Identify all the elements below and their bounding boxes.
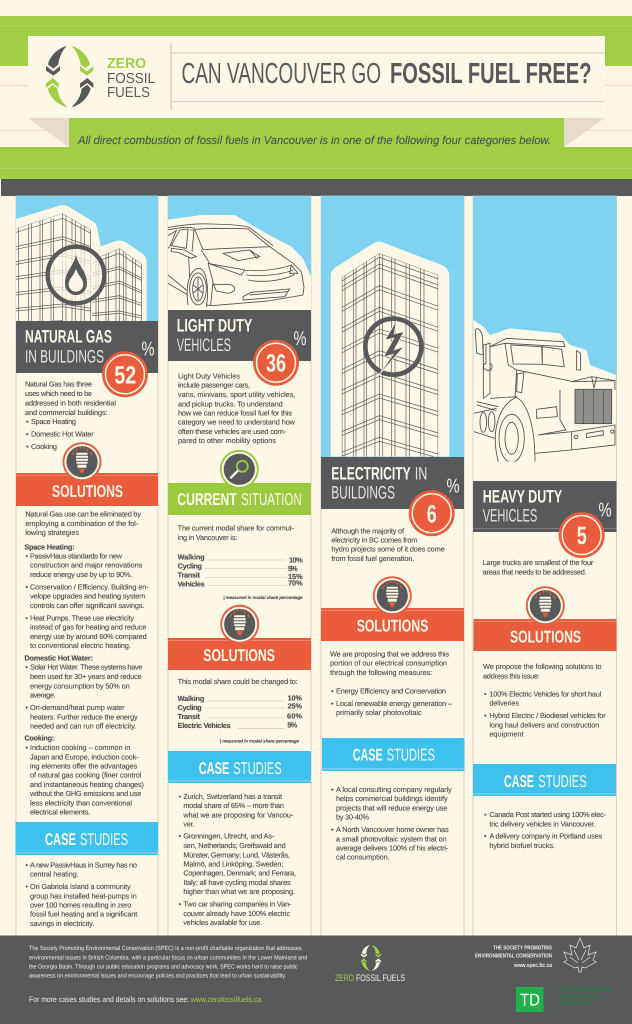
text: electricity intro: electricity in BC comes from [331,536,417,544]
header: electricity in buildings: ELECTRICITY [331,463,411,483]
text: natural gas solutions: instead of gas for heating and reduce [30,623,146,631]
text: about SPEC: awareness on environmental issues and encourage policies and practices that lead to urban sustainability. [29,972,287,979]
text: heavy duty solutions: Hybrid Electric / Biodiesel vehicles for [489,711,606,720]
text: proposed modal share: Cycling [178,703,202,712]
text: electricity case studies: A local consulting company regularly [336,785,452,794]
text: natural gas solutions: • [25,703,28,712]
band: case studies: CASE [199,759,229,778]
text: natural gas solutions: Cooking: [24,734,54,742]
text: electricity solutions: Local renewable energy generation – [336,699,452,708]
text: natural gas case studies: group has installed heat-pumps in [30,892,137,900]
text: natural gas intro [25,380,116,451]
text: current modal share: The current modal share for commut- [178,524,294,532]
stat: 36 percent: 36 [266,350,286,378]
text: natural gas solutions: less electricity than conventional [30,799,132,807]
text: natural gas intro: addressed in both residential [25,399,116,407]
band: case studies: STUDIES [387,746,435,765]
text: current modal share: Cycling [178,562,202,570]
text: electricity case studies: average delivers 100% of his electri- [336,844,448,852]
text: natural gas solutions: Solar Hot Water. These systems have [30,663,142,671]
icon: lightning bolt [365,319,421,375]
header: light duty vehicles: % [294,328,307,350]
text: natural gas intro: Natural Gas has three [25,380,92,388]
text: natural gas solutions: construction and major renovations [30,561,142,569]
icon: gas flame drop [48,247,104,303]
footer logo [335,945,405,984]
text: electricity solutions: Energy Efficiency and Conservation [336,687,446,695]
text: electricity solutions: through the following measures: [330,668,432,677]
text: heavy duty case studies: • [484,832,487,840]
text: heavy duty solutions: deliveries [489,699,519,707]
text: current modal share: ing in Vancouver is: [178,533,237,542]
text: vehicles case studies: sen, Netherlands; Greifswald and [183,841,286,850]
text: current modal share: Transit [178,571,200,579]
icon: SPEC maple leaf [564,938,596,972]
header: light duty vehicles: VEHICLES [177,335,231,355]
text: vehicles case studies: modal share of 65% – more than [183,801,284,810]
band: case studies: STUDIES [538,772,587,791]
text: heavy duty solutions: 100% Electric Vehicles for short haul [489,690,601,698]
panel: electricity in buildings [321,196,464,936]
icon: magnifying glass [220,450,259,489]
header: heavy duty vehicles: HEAVY DUTY [483,486,562,506]
text: natural gas solutions: and instantaneous heating changes) [30,780,144,789]
text: electricity solutions: We are proposing that we address this [330,650,449,658]
text: vehicles case studies: Italy; all have cycling modal shares [183,878,291,887]
header: light duty vehicles: LIGHT DUTY [177,316,252,336]
stat: 6 percent [409,490,455,536]
band: solutions [16,473,158,506]
text: electricity solutions: portion of our electrical consumption [330,659,447,667]
logo mark [46,46,93,107]
text: natural gas solutions: • [25,614,28,622]
text: natural gas solutions: • [25,743,28,752]
header: heavy duty vehicles: % [598,500,612,522]
text: current modal share: Walking [178,553,205,561]
text: natural gas solutions: lowing strategies [25,528,79,537]
text: light duty intro: category we need to understand how [178,418,295,426]
stat: 5 percent: 5 [577,522,587,550]
band: current situation: CURRENT [177,490,237,509]
text: natural gas intro: Space Heating [31,417,76,426]
text: natural gas solutions: heaters. Further reduce the energy [30,713,138,721]
text: natural gas case studies: central heating. [30,870,79,878]
header: electricity in buildings: IN [415,463,427,483]
text: electricity case studies: A North Vancouver home owner has [336,825,449,834]
text: current modal share: 70% [288,579,303,587]
text: about SPEC [29,945,307,979]
text: vehicles case studies: Münster, Germany; Lund, Västerås, [183,851,290,859]
header: electricity in buildings [321,457,464,509]
text: vehicles case studies: ver. [183,820,194,828]
text: vehicles case studies: • [179,832,181,840]
header: natural gas [16,321,158,373]
text: light duty intro [178,372,295,445]
SPEC name: www.spec.bc.ca [513,962,553,969]
text: light duty intro: Light Duty Vehicles [178,372,240,380]
band: current situation [168,483,311,515]
text: natural gas intro: uses which need to be [25,389,92,398]
text: natural gas solutions: employing a combination of the fol- [25,519,138,528]
text: proposed modal share: | measured in modal share percentage [220,738,299,743]
title: CAN VANCOUVER GO [182,58,381,90]
header: natural gas: NATURAL GAS [25,327,112,347]
text: about SPEC: environmental issues in British Columbia, with a particular focus on urban communities in the Lower Mainland and [29,954,307,961]
band: solutions [168,638,311,670]
text: heavy duty solutions: address this issue: [483,672,540,680]
text: natural gas case studies: savings in electricity. [30,919,94,928]
band: case studies: CASE [45,830,76,849]
TD Friends of the Environment Foundation [556,985,613,1013]
text: natural gas case studies: over 100 homes resulting in zero [30,901,131,909]
text: natural gas solutions: to conventional electric heating. [30,641,131,650]
TD logo [516,987,544,1012]
text: vehicles case studies: • [179,792,181,801]
text: current modal share: | measured in modal share percentage [223,595,303,600]
TD Friends of the Environment Foundation: Foundation [561,1000,591,1007]
text: natural gas solutions: • [25,663,28,671]
footer logo: ZERO [335,973,354,984]
text: proposed modal share: Electric Vehicles [178,721,231,730]
text: natural gas solutions: average. [30,691,56,699]
text: heavy duty case studies: hybrid biofuel trucks. [489,841,555,850]
text: electricity solutions: primarily solar photovoltaic [336,708,422,717]
text: heavy duty solutions: We propose the following solutions to [483,662,602,671]
icon: light bulb [373,576,412,615]
text: natural gas solutions: Domestic Hot Water: [24,654,93,662]
text: proposed modal share: 25% [288,702,302,710]
text: light duty intro: often these vehicles are used com- [178,427,286,436]
stat: 52 percent [102,351,148,397]
footer [0,936,632,1024]
SPEC name: ENVIRONMENTAL CONSERVATION [475,953,552,960]
text: electricity case studies: a small photovoltaic system that on [336,835,447,843]
text: natural gas case studies: A new PassivHaus in Surrey has no [30,861,137,869]
TD Friends of the Environment Foundation: TD Friends of the [561,986,613,993]
footer logo: FOSSIL FUELS [356,973,405,984]
header: heavy duty vehicles [473,481,616,532]
icon: light bulb [62,442,102,481]
logo wordmark: FOSSIL [107,71,155,87]
text: natural gas solutions: needed and can run off electricity. [30,722,136,730]
header: light duty vehicles [168,310,311,361]
text: electricity intro [331,527,445,563]
text: electricity case studies: by 30-40% [336,813,369,821]
text: current modal share [178,524,303,600]
text: natural gas intro: • [26,430,29,438]
text: natural gas intro: Cooking [31,442,57,451]
logo wordmark: ZERO [107,56,146,72]
text: proposed modal share: 5% [287,721,297,729]
text: vehicles case studies: higher than what we are proposing. [183,887,295,896]
icon: light bulb [526,586,565,625]
text: vehicles case studies: Gronningen, Utrecht, and As- [183,832,274,840]
band: solutions [321,608,464,641]
text: heavy duty solutions: • [484,690,487,698]
text: electricity case studies: • [331,785,334,794]
text: vehicles case studies [179,792,296,927]
text: vehicles case studies: vehicles available for use. [183,918,262,927]
icon: light bulb [220,605,259,644]
text: natural gas solutions: ing elements offer the advantages [30,762,137,770]
band: solutions: SOLUTIONS [510,628,581,646]
text: light duty intro: how we can reduce fossil fuel for this [178,409,292,417]
SPEC name: THE SOCIETY PROMOTING [493,944,552,952]
text: natural gas solutions: Conservation / Efficiency. Building en- [30,583,149,591]
text: electricity solutions: • [331,687,334,695]
stat: 36 percent [253,340,299,386]
text: current modal share: 5% [288,564,298,573]
text: natural gas solutions: On-demand/heat pump water [30,703,125,712]
text: proposed modal share: 60% [287,712,302,720]
text: natural gas intro: and commercial buildings: [25,408,108,417]
text: light duty intro: pared to other mobility options [178,436,276,445]
illustration: truck [473,320,616,481]
stat: 52 percent: 52 [114,361,136,389]
text: light duty intro: and pickup trucks. To understand [178,400,283,408]
panel: heavy duty vehicles [473,196,616,936]
text: proposed modal share: Walking [178,694,204,703]
text: electricity case studies: helps commercial buildings identify [336,794,448,803]
text: natural gas case studies: • [25,882,28,891]
text: natural gas solutions [24,510,149,816]
text: heavy duty case studies [484,810,606,850]
band: case studies: STUDIES [80,830,128,849]
dark divider bar [1,179,632,196]
text: current modal share: 10% [289,556,303,564]
text: vehicles case studies: Two car sharing companies in Van- [183,900,291,908]
text: about SPEC: the Georgia Basin. Through our public education programs and advocacy work, SPEC works hard to raise public [29,963,298,970]
band: case studies [168,751,311,783]
text: electricity intro: Although the majority of [331,527,404,535]
TD Friends of the Environment Foundation: Environment [561,993,600,1000]
text: electricity intro: hydro projects some of it does come [331,545,445,553]
stat: 5 percent [559,512,605,558]
header: electricity in buildings: BUILDINGS [331,482,395,502]
text: light duty intro: include passenger cars, [178,381,250,389]
TD logo: TD [520,990,540,1010]
text: vehicles case studies: Zurich, Switzerland has a transit [183,792,282,801]
text: natural gas solutions: electrical elements. [30,808,90,816]
text: heavy duty solutions [483,662,606,738]
text: more information link: www.zerofossilfuels.ca [190,995,262,1004]
header: natural gas: IN BUILDINGS [25,346,104,366]
band: case studies: STUDIES [233,759,282,778]
text: heavy duty case studies: • [484,810,487,819]
text: natural gas solutions: energy use by around 60% compared [30,632,147,641]
text: heavy duty solutions: • [484,711,487,720]
text: natural gas solutions: energy consumption by 50% on [30,682,130,690]
text: heavy duty solutions: equipment [489,730,524,738]
text: proposed modal share: 10% [288,694,302,702]
text: electricity case studies [331,785,452,861]
header: heavy duty vehicles: VEHICLES [483,506,537,526]
header: natural gas: % [142,339,155,361]
header: electricity in buildings: % [446,476,460,498]
SPEC name [475,944,553,969]
text: natural gas case studies: • [25,861,28,869]
text: heavy duty intro [483,558,593,576]
panel: light duty vehicles [168,196,311,936]
text: proposed modal share [178,677,302,743]
text: electricity solutions [330,650,452,717]
text: natural gas solutions: Space Heating: [24,543,75,551]
text: natural gas solutions: of natural gas cooking (finer control [30,771,141,779]
illustration: car [168,215,311,310]
text: vehicles case studies: what we are proposing for Vancou- [183,811,293,819]
band: solutions: SOLUTIONS [52,482,123,501]
text: vehicles case studies: couver already have 100% electric [183,909,290,918]
text: natural gas solutions: • [25,583,28,591]
band: solutions [474,619,616,651]
text: light duty intro: vans, minivans, sport utility vehicles, [178,390,295,399]
text: heavy duty intro: Large trucks are smallest of the four [483,558,593,567]
text: heavy duty case studies: tric delivery vehicles in Vancouver. [489,820,595,828]
text: electricity case studies: projects that will reduce energy use [336,804,447,812]
text: vehicles case studies: Copenhagen, Denmark; and Ferrara, [183,869,296,877]
band: solutions: SOLUTIONS [203,646,275,665]
text: natural gas solutions: controls can offer significant savings. [30,601,144,610]
band: solutions: SOLUTIONS [357,616,428,636]
top banner band [0,16,632,179]
subtitle: All direct combustion of fossil fuels in Vancouver is in one of the following four categories below. [77,135,551,147]
text: natural gas solutions: Induction cooking – common in [30,743,130,752]
panel: natural gas in buildings [16,196,158,936]
text: heavy duty case studies: A delivery company in Portland uses [489,832,602,840]
text: proposed modal share: This modal share could be changed to: [178,677,298,686]
text: natural gas intro: • [26,442,29,451]
text: electricity case studies: cal consumption. [336,853,390,861]
text: heavy duty case studies: Canada Post started using 100% elec- [489,810,606,819]
text: proposed modal share: Transit [178,712,200,721]
band: case studies: CASE [353,746,383,765]
text: natural gas solutions: been used for 30+ years and reduce [30,672,142,681]
text: electricity solutions: • [331,699,334,708]
band: case studies [16,822,158,855]
logo: zero fossil fuels [46,46,155,107]
text: natural gas solutions: Japan and Europe, induction cook- [30,753,139,761]
text: natural gas solutions: without the GHG emissions and use [30,789,141,798]
illustration: office buildings [16,205,147,323]
text: electricity intro: from fossil fuel generation. [331,554,414,563]
text: more information link: For more cases studies and details on solutions see: [29,995,189,1004]
band: case studies [322,738,464,771]
text: vehicles case studies: • [179,900,181,908]
band: case studies [473,764,616,796]
logo wordmark [107,56,155,101]
text: natural gas solutions: reduce energy use by up to 90%. [30,570,132,579]
text: vehicles case studies: Malmö, and Linköping, Sweden; [183,860,283,868]
text: natural gas solutions: velope upgrades and heating system [30,592,145,600]
text: heavy duty intro: areas that needs to be addressed. [483,568,587,576]
text: electricity case studies: • [331,825,334,834]
text: natural gas solutions: • [25,552,28,560]
text: current modal share: Vehicles [178,580,205,588]
text: current modal share: 15% [288,572,303,581]
text: natural gas case studies: On Gabriola Island a community [30,882,131,891]
text: natural gas case studies: fossil fuel heating and a significant [30,910,137,918]
text: natural gas solutions: Heat Pumps. These use electricity [30,614,134,622]
text: natural gas case studies [25,861,137,928]
illustration: tower [331,242,449,458]
band: current situation: SITUATION [241,490,302,509]
text: about SPEC: The Society Promoting Environmental Conservation (SPEC) is a non-profit charitable organization that addresses [29,945,302,952]
text: heavy duty solutions: long haul delivers and construction [489,721,599,729]
text: natural gas solutions: Natural Gas use can be eliminated by [25,510,141,518]
text: natural gas intro: Domestic Hot Water [31,430,94,438]
stat: 6 percent: 6 [427,500,437,528]
band: case studies: CASE [504,772,534,791]
text: natural gas solutions: PassivHaus standards for new [30,552,122,560]
text: natural gas intro: • [26,417,29,426]
logo wordmark: FUELS [107,85,150,101]
